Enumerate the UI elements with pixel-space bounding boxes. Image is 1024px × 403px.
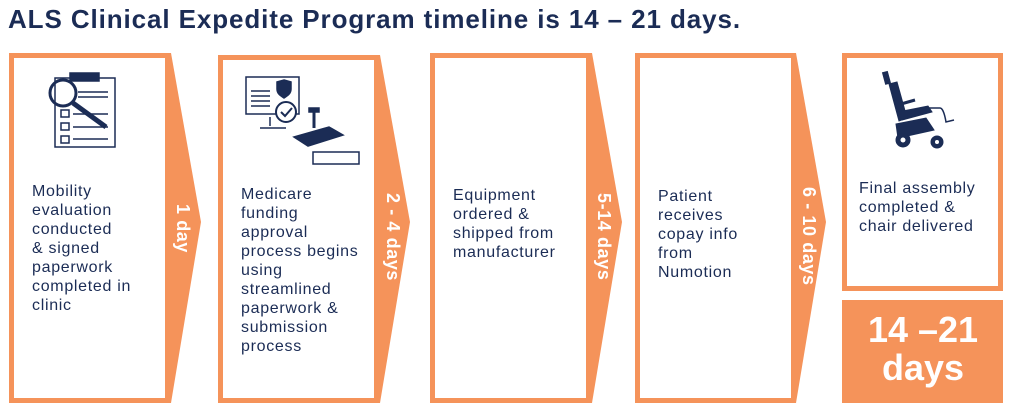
arrow label: 2 - 4 days: 2 - 4 days [383,193,403,281]
text: medicare funding: approval [241,224,308,241]
text: medicare funding: paperwork & [241,300,339,317]
title: ALS Clinical Expedite Program timeline is 14 – 21 days. [8,4,741,34]
text: mobility evaluation: paperwork [32,259,113,276]
text: final assembly: chair delivered [859,218,974,235]
text: equipment ordered: manufacturer [453,244,556,261]
text: patient copay: receives [658,207,723,224]
text: medicare funding: process begins [241,243,358,260]
panel: equipment ordered [430,53,622,403]
panel: medicare funding [218,55,410,403]
text: medicare funding: process [241,338,302,355]
text: mobility evaluation: Mobility [32,183,92,200]
panel: final assembly [842,53,1003,291]
text: medicare funding: submission [241,319,328,336]
text: equipment ordered: shipped from [453,225,554,242]
icon: monitor and stamp [246,77,359,164]
text: mobility evaluation: conducted [32,221,112,238]
text: mobility evaluation: & signed [32,240,100,257]
text: patient copay: copay info [658,226,738,243]
text: equipment ordered: Equipment [453,187,536,204]
text: final assembly: completed & [859,199,956,216]
text: mobility evaluation: evaluation [32,202,112,219]
panel: patient copay [635,53,826,403]
arrow label: 6 - 10 days: 6 - 10 days [799,187,819,286]
text: medicare funding: streamlined [241,281,331,298]
callout: total days: days [882,347,964,388]
text: patient copay: Patient [658,188,713,205]
text: patient copay: Numotion [658,264,732,281]
text: final assembly: Final assembly [859,180,976,197]
text: medicare funding: using [241,262,283,279]
callout: total days: 14 –21 [868,309,978,350]
arrow label: 5-14 days: 5-14 days [594,193,614,280]
icon: clipboard with magnifier [50,73,115,147]
arrow label: 1 day: 1 day [173,204,193,253]
text: medicare funding: funding [241,205,298,222]
panel: mobility evaluation [9,53,201,403]
text: mobility evaluation: completed in [32,278,131,295]
text: equipment ordered: ordered & [453,206,530,223]
text: mobility evaluation: clinic [32,297,72,314]
icon: power wheelchair [883,71,954,148]
text: patient copay: from [658,245,693,262]
text: medicare funding: Medicare [241,186,312,203]
callout: total days [842,300,1003,403]
